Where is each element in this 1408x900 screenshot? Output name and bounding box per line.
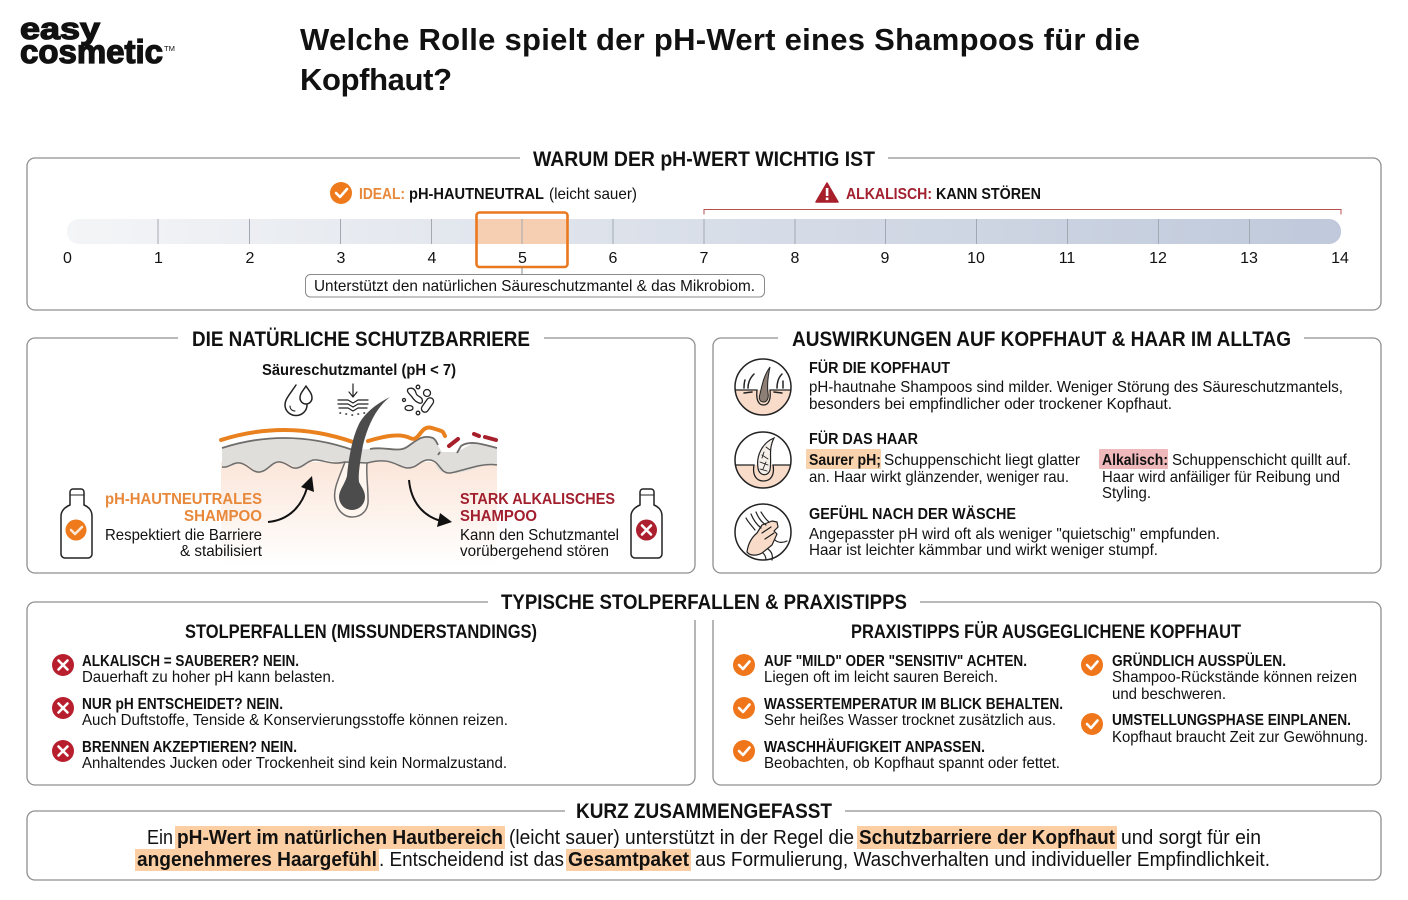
pH scale bar xyxy=(67,219,1341,244)
tip: Umstellungsphase: Kopfhaut braucht Zeit zur Gewöhnung. xyxy=(1112,729,1368,746)
summary text: und sorgt für ein xyxy=(1121,826,1261,849)
summary text: Ein xyxy=(147,826,173,849)
tip: gründlich ausspülen xyxy=(1081,651,1357,703)
arrow: stört xyxy=(409,480,452,527)
pH scale numbers: 14 xyxy=(1331,250,1349,267)
logo: easy cosmetic: cosmetic xyxy=(20,33,163,70)
panel: warum der pH-Wert wichtig ist xyxy=(27,147,1381,310)
pH scale numbers: 11 xyxy=(1059,250,1075,267)
summary text: angenehmeres Haargefühl xyxy=(137,848,377,871)
text: für das Haar: FÜR DAS HAAR xyxy=(809,429,918,448)
panel: Stolperfallen xyxy=(27,602,695,785)
tip: gründlich ausspülen: und beschweren. xyxy=(1112,686,1226,703)
icon: hand washing hair xyxy=(735,504,791,560)
label: stark alkalisches Shampoo: STARK ALKALISCHES xyxy=(460,491,615,508)
tip: gründlich ausspülen: GRÜNDLICH AUSSPÜLEN. xyxy=(1112,651,1286,670)
heading: kurz zusammengefasst: KURZ ZUSAMMENGEFASST xyxy=(576,799,832,823)
label: alkalisch kann stören xyxy=(816,183,1041,203)
logo: easy cosmetic: easy xyxy=(20,11,101,46)
panel: Praxistipps xyxy=(713,602,1381,785)
text: für die Kopfhaut xyxy=(809,358,1343,413)
label: stark alkalisches Shampoo: vorübergehend stören xyxy=(460,543,609,560)
title xyxy=(300,22,1140,97)
text: für das Haar: Schuppenschicht liegt glatter xyxy=(884,452,1081,469)
text: für das Haar: Saurer pH; xyxy=(809,452,881,469)
heading: typische Stolperfallen und Praxistipps: TYPISCHE STOLPERFALLEN & PRAXISTIPPS xyxy=(501,590,907,614)
text: Gefühl nach der Wäsche: GEFÜHL NACH DER WÄSCHE xyxy=(809,504,1016,523)
label: ideal pH-hautneutral: pH-HAUTNEUTRAL xyxy=(409,186,544,203)
text: für die Kopfhaut: FÜR DIE KOPFHAUT xyxy=(809,358,950,377)
summary text: aus Formulierung, Waschverhalten und individueller Empfindlichkeit. xyxy=(695,848,1270,871)
pH scale numbers: 8 xyxy=(791,250,800,267)
pH scale numbers: 7 xyxy=(700,250,709,267)
subheading: Stolperfallen: STOLPERFALLEN (MISSUNDERSTANDINGS) xyxy=(185,621,537,643)
highlight: pH 5 range xyxy=(476,212,568,267)
callout: Säureschutzmantel: Unterstützt den natürlichen Säureschutzmantel & das Mikrobiom. xyxy=(314,278,755,295)
icon: hair strand xyxy=(735,432,791,495)
bracket: alkalischer Bereich xyxy=(704,210,1341,214)
heading: die natürliche Schutzbarriere: DIE NATÜRLICHE SCHUTZBARRIERE xyxy=(192,326,530,351)
panel: kurz zusammengefasst xyxy=(27,799,1381,880)
summary text: (leicht sauer) unterstützt in der Regel die xyxy=(509,826,854,849)
pH scale numbers: 3 xyxy=(337,250,346,267)
skin: epidermis band xyxy=(222,437,497,473)
skin: top lines xyxy=(222,437,497,455)
logo: easy cosmetic xyxy=(20,11,175,70)
item: brennen akzeptieren: BRENNEN AKZEPTIEREN? NEIN. xyxy=(82,739,297,756)
tip: mild oder sensitiv xyxy=(733,653,1027,686)
illustration: skin cross-section with hair xyxy=(221,397,497,566)
tip: Waschhäufigkeit: Beobachten, ob Kopfhaut spannt oder fettet. xyxy=(764,755,1060,772)
text: für das Haar: Schuppenschicht quillt auf. xyxy=(1172,452,1351,469)
icon: bottle with cross xyxy=(631,489,662,558)
tip: Umstellungsphase xyxy=(1081,712,1368,746)
item: nur pH entscheidet xyxy=(52,696,508,729)
pH scale numbers: 6 xyxy=(609,250,618,267)
summary highlights xyxy=(135,826,1117,871)
acid mantle: damaged red dashes xyxy=(449,434,496,446)
tip: mild oder sensitiv: Liegen oft im leicht sauren Bereich. xyxy=(764,669,998,686)
subheading: Praxistipps: PRAXISTIPPS FÜR AUSGEGLICHENE KOPFHAUT xyxy=(851,620,1241,643)
label: alkalisch kann stören: ALKALISCH: xyxy=(846,186,932,203)
label: alkalisch kann stören: KANN STÖREN xyxy=(936,184,1041,203)
heading: Auswirkungen: AUSWIRKUNGEN AUF KOPFHAUT & HAAR IM ALLTAG xyxy=(792,327,1291,351)
text: für das Haar: Styling. xyxy=(1102,485,1151,502)
label: stark alkalisches Shampoo: SHAMPOO xyxy=(460,508,537,525)
item: nur pH entscheidet: Auch Duftstoffe, Tenside & Konservierungsstoffe können reizen. xyxy=(82,712,508,729)
pH scale numbers xyxy=(63,250,1349,267)
tip: Wassertemperatur: Sehr heißes Wasser trocknet zusätzlich aus. xyxy=(764,712,1056,729)
item: alkalisch = sauberer xyxy=(52,653,335,686)
icon: skin layer with arrow xyxy=(338,384,368,415)
heading: warum der pH-Wert wichtig ist: WARUM DER pH-WERT WICHTIG IST xyxy=(533,147,875,171)
text: Gefühl nach der Wäsche xyxy=(809,504,1220,559)
item: alkalisch = sauberer: ALKALISCH = SAUBERER? NEIN. xyxy=(82,653,299,670)
tip: mild oder sensitiv: AUF "MILD" ODER "SENSITIV" ACHTEN. xyxy=(764,653,1027,670)
skin: hair follicle xyxy=(335,462,368,517)
label: pH-hautneutrales Shampoo: Respektiert die Barriere xyxy=(105,527,262,544)
label: pH-hautneutrales Shampoo: & stabilisiert xyxy=(180,543,263,560)
skin: wavy lower border xyxy=(222,460,497,473)
icon: scalp xyxy=(735,359,791,420)
text: Gefühl nach der Wäsche: Angepasster pH wird oft als weniger "quietschig" empfunden. xyxy=(809,526,1220,543)
icon: bottle with check xyxy=(61,489,92,558)
acid mantle: orange layer xyxy=(221,427,445,442)
summary text: . Entscheidend ist das xyxy=(379,848,564,871)
skin: dermis glow xyxy=(221,462,497,566)
pH scale numbers: 0 xyxy=(63,250,72,267)
tip: gründlich ausspülen: Shampoo-Rückstände können reizen xyxy=(1112,669,1357,686)
pH scale numbers: 10 xyxy=(967,250,985,267)
label: pH-hautneutrales Shampoo: pH-HAUTNEUTRALES xyxy=(105,491,262,508)
panel: Auswirkungen auf Kopfhaut und Haar xyxy=(713,327,1381,573)
panel: die natürliche Schutzbarriere xyxy=(27,326,695,573)
label: pH-hautneutrales Shampoo: SHAMPOO xyxy=(184,508,262,525)
tip: Wassertemperatur xyxy=(733,696,1063,729)
summary text: pH-Wert im natürlichen Hautbereich xyxy=(177,826,503,849)
pH scale numbers: 1 xyxy=(154,250,163,267)
title: Kopfhaut? xyxy=(300,62,452,97)
pH scale numbers: 5 xyxy=(518,250,527,267)
item: nur pH entscheidet: NUR pH ENTSCHEIDET? NEIN. xyxy=(82,696,283,713)
item: brennen akzeptieren xyxy=(52,739,507,772)
tip: Waschhäufigkeit: WASCHHÄUFIGKEIT ANPASSEN. xyxy=(764,738,985,756)
pH scale numbers: 9 xyxy=(881,250,890,267)
summary text: Gesamtpaket xyxy=(568,848,689,871)
arrow: stabilisiert xyxy=(268,476,314,522)
logo: easy cosmetic: TM xyxy=(164,46,175,53)
text: für das Haar: Haar wird anfäiliger für Reibung und xyxy=(1102,469,1340,486)
tip: Waschhäufigkeit xyxy=(733,738,1060,772)
item: brennen akzeptieren: Anhaltendes Jucken oder Trockenheit sind kein Normalzustand. xyxy=(82,755,507,772)
label: ideal pH-hautneutral xyxy=(330,182,637,204)
text: für das Haar xyxy=(806,429,1351,502)
tip: Umstellungsphase: UMSTELLUNGSPHASE EINPLANEN. xyxy=(1112,712,1351,729)
hair shaft and bulb xyxy=(339,397,390,510)
pH scale numbers: 4 xyxy=(428,250,437,267)
label: pH-hautneutrales Shampoo xyxy=(105,491,263,560)
text: Gefühl nach der Wäsche: Haar ist leichter kämmbar und wirkt weniger stumpf. xyxy=(809,542,1158,559)
pH scale numbers: 12 xyxy=(1149,250,1167,267)
label: ideal pH-hautneutral: (leicht sauer) xyxy=(549,186,637,203)
title: Welche Rolle spielt der pH-Wert eines Shampoos für die xyxy=(300,22,1140,57)
text: für die Kopfhaut: besonders bei empfindlicher oder trockener Kopfhaut. xyxy=(809,396,1172,413)
summary text xyxy=(137,826,1270,871)
item: alkalisch = sauberer: Dauerhaft zu hoher pH kann belasten. xyxy=(82,669,335,686)
pH scale numbers: 2 xyxy=(246,250,255,267)
tip: Wassertemperatur: WASSERTEMPERATUR IM BLICK BEHALTEN. xyxy=(764,696,1063,713)
icon: water drops xyxy=(285,385,312,416)
pH scale numbers: 13 xyxy=(1240,250,1258,267)
label: stark alkalisches Shampoo: Kann den Schutzmantel xyxy=(460,527,619,544)
text: für das Haar: Alkalisch: xyxy=(1102,452,1168,469)
icon: microbes xyxy=(402,385,435,415)
label: ideal pH-hautneutral: IDEAL: xyxy=(359,186,405,203)
label: stark alkalisches Shampoo xyxy=(460,491,619,560)
text: für das Haar: an. Haar wirkt glänzender, weniger rau. xyxy=(809,469,1069,486)
text: für die Kopfhaut: pH-hautnahe Shampoos sind milder. Weniger Störung des Säureschutzmantels, xyxy=(809,379,1343,396)
summary text: Schutzbarriere der Kopfhaut xyxy=(859,826,1115,849)
label: Säureschutzmantel: Säureschutzmantel (pH < 7) xyxy=(262,362,456,379)
